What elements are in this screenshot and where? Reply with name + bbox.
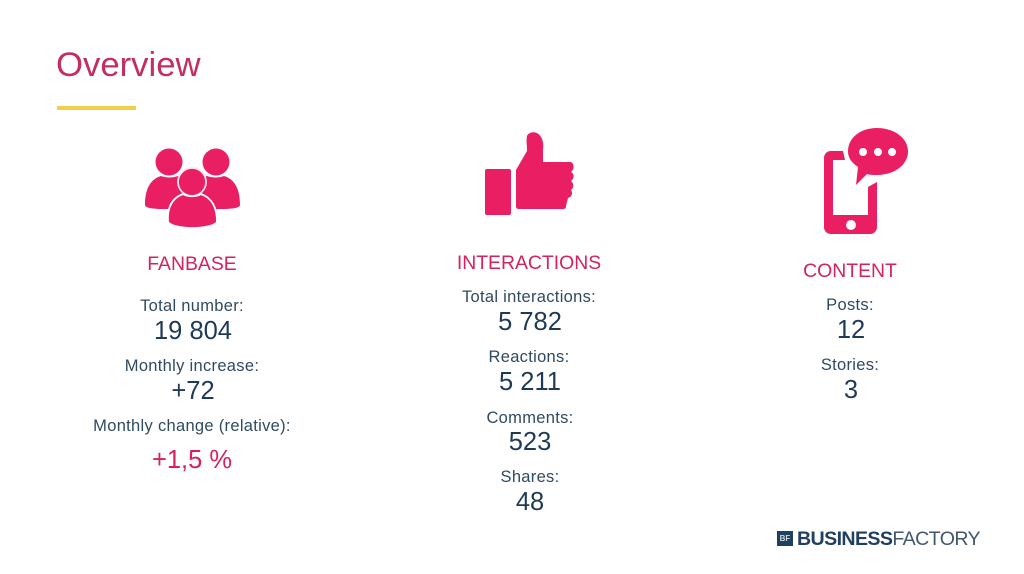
comments value: 523 bbox=[509, 428, 551, 456]
icon: phone with speech bubble bbox=[824, 128, 908, 234]
reactions value: 5 211 bbox=[499, 368, 561, 396]
bubble dots bbox=[859, 148, 896, 156]
comments label: Comments: bbox=[486, 409, 574, 427]
monthly change value: +1,5 % bbox=[152, 446, 232, 474]
posts value: 12 bbox=[837, 316, 865, 344]
monthly increase value: +72 bbox=[171, 377, 215, 405]
fanbase heading: FANBASE bbox=[147, 253, 237, 275]
monthly change label: Monthly change (relative): bbox=[93, 417, 291, 435]
reactions label: Reactions: bbox=[489, 348, 569, 366]
content heading: CONTENT bbox=[803, 260, 897, 282]
total number label: Total number: bbox=[140, 297, 244, 315]
interactions heading: INTERACTIONS bbox=[457, 252, 601, 274]
title: Overview bbox=[56, 46, 201, 84]
icon: fanbase people bbox=[145, 148, 240, 228]
logo bbox=[777, 528, 980, 550]
shares value: 48 bbox=[516, 488, 544, 516]
speech bubble bbox=[848, 128, 908, 185]
phone button bbox=[846, 220, 856, 230]
phone body bbox=[824, 151, 877, 234]
stories label: Stories: bbox=[821, 356, 879, 374]
logo badge: BF bbox=[780, 534, 790, 543]
shares label: Shares: bbox=[501, 468, 559, 486]
icon: thumbs up bbox=[485, 132, 574, 215]
monthly increase label: Monthly increase: bbox=[125, 357, 259, 375]
stories value: 3 bbox=[844, 376, 858, 404]
total interactions label: Total interactions: bbox=[462, 288, 596, 306]
logo badge bbox=[777, 531, 793, 546]
total interactions value: 5 782 bbox=[498, 308, 562, 336]
logo wordmark: BUSINESSFACTORY bbox=[797, 528, 980, 550]
title accent bar bbox=[57, 106, 136, 110]
posts label: Posts: bbox=[826, 296, 874, 314]
total number value: 19 804 bbox=[154, 317, 232, 345]
